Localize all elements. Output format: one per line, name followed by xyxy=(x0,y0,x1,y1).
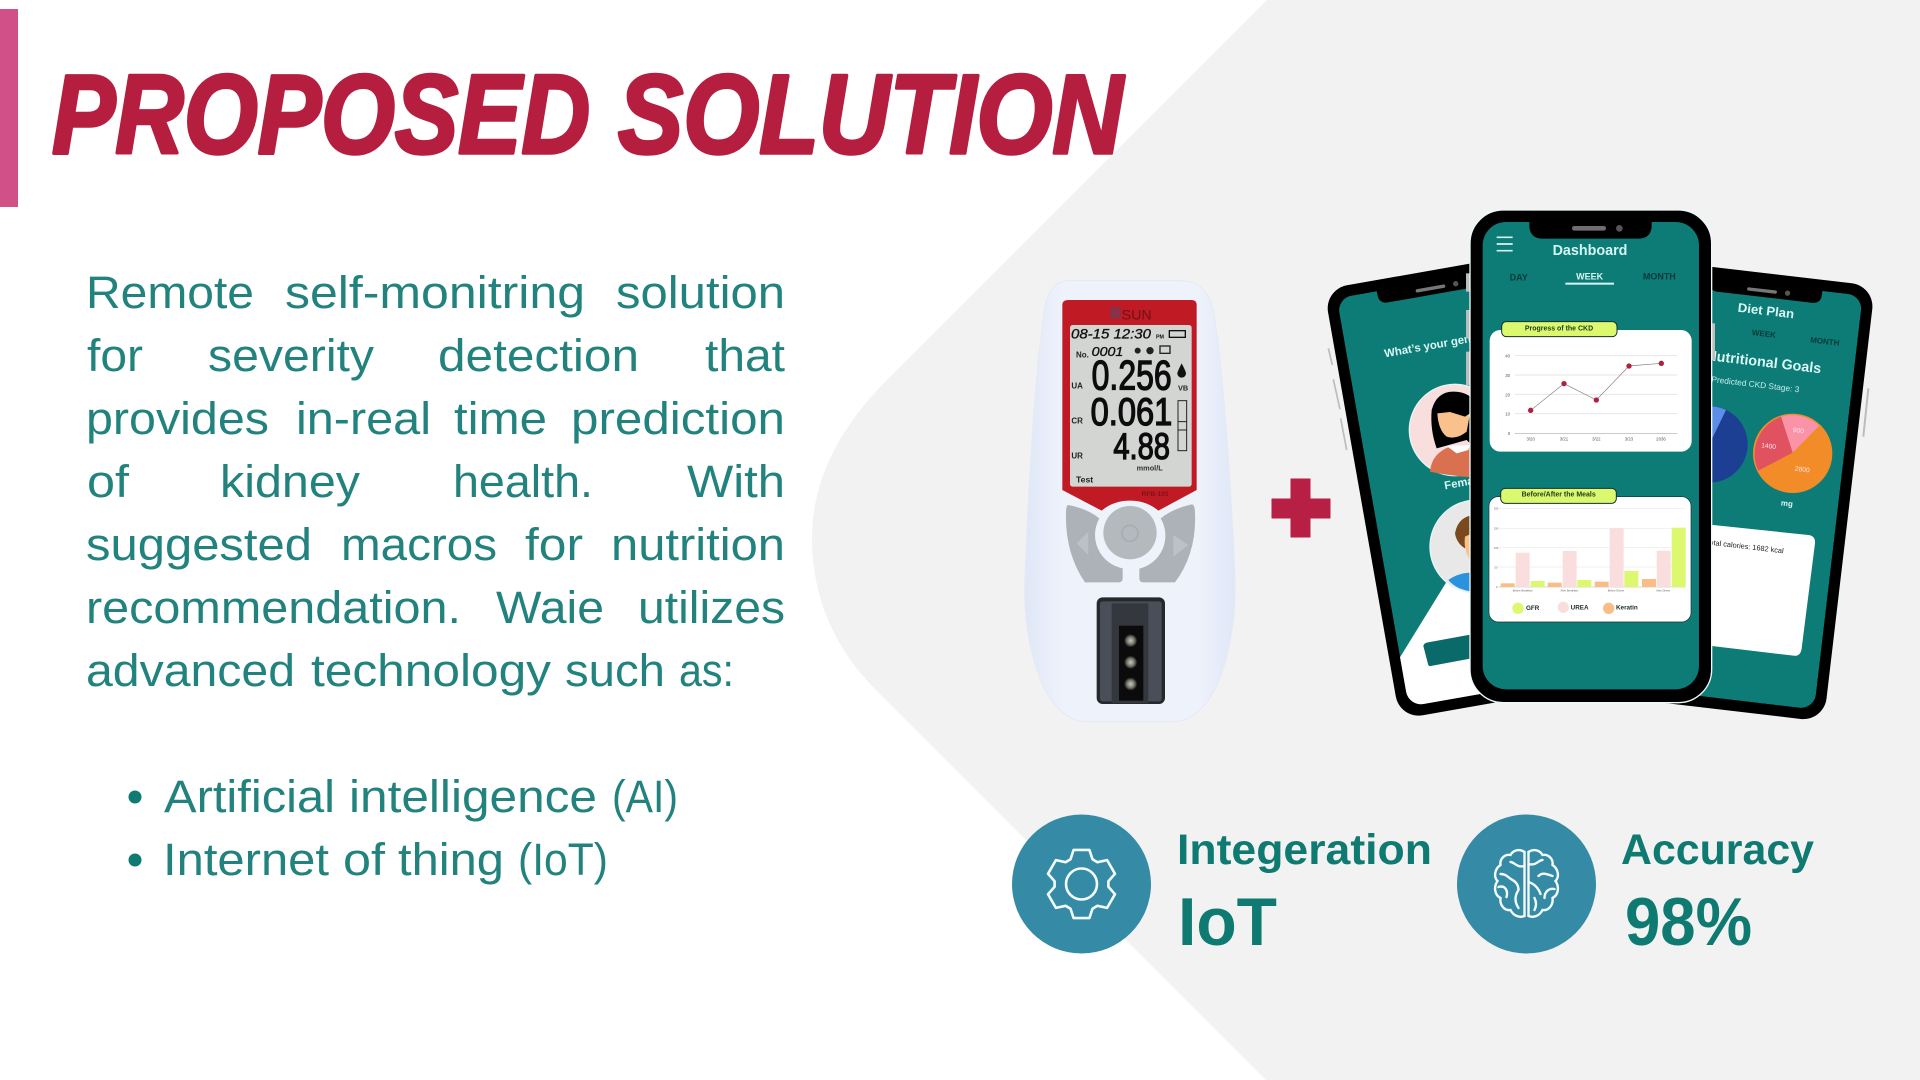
phone: diet plan screen (right): Diet Plan xyxy=(1737,301,1795,321)
body text xyxy=(86,267,786,696)
phone: gender screen (left) xyxy=(1328,264,1496,716)
body text: health. xyxy=(453,456,593,507)
body text: recommendation. xyxy=(86,582,461,633)
phone: gender screen (left): Female xyxy=(1443,474,1484,492)
bullet list: thing xyxy=(398,834,504,885)
phone: diet plan screen (right): WEEK xyxy=(1751,328,1777,340)
body text: advanced xyxy=(86,645,295,696)
stat: integration IoT: IoT xyxy=(1178,884,1277,960)
bar chart card: After Breakfast xyxy=(1561,588,1578,592)
device LCD screen: Test xyxy=(1076,475,1093,485)
title: PROPOSED xyxy=(52,52,590,177)
bullet list: (IoT) xyxy=(518,834,608,885)
body text: With xyxy=(687,456,785,507)
line chart card: 20 xyxy=(1505,392,1511,397)
body text: of xyxy=(87,456,130,507)
body text: nutrition xyxy=(611,519,785,570)
body text: detection xyxy=(438,330,639,381)
phone: diet plan screen (right): Nutritional Goals xyxy=(1706,348,1822,377)
bar chart card: Before Breakfast xyxy=(1513,588,1533,592)
bullet list xyxy=(128,771,678,885)
device LCD screen: mmol/L xyxy=(1137,464,1163,473)
bullet list: (AI) xyxy=(612,771,678,822)
bullet list: Artificial xyxy=(164,771,335,822)
title: SOLUTION xyxy=(618,52,1125,177)
phone: diet plan screen (right) xyxy=(1666,266,1872,720)
device LCD screen: No. xyxy=(1076,350,1089,359)
bar chart card: 100 xyxy=(1494,546,1499,550)
body text: utilizes xyxy=(638,582,785,633)
body text: provides xyxy=(86,393,269,444)
device LCD screen: SUN xyxy=(1122,306,1152,322)
phone: diet plan screen (right): MONTH xyxy=(1810,335,1840,348)
device test strip port xyxy=(1097,597,1165,704)
line chart card: 0 xyxy=(1508,431,1511,436)
device LCD screen: 08-15 12:30 xyxy=(1071,326,1151,342)
bullet list: Internet xyxy=(163,834,330,885)
line chart card: 3/23 xyxy=(1625,437,1634,442)
body text: solution xyxy=(616,267,785,318)
phone: diet plan screen (right): Predicted CKD Stage: 3 xyxy=(1711,374,1800,394)
icon: plus sign xyxy=(1272,479,1330,537)
device LCD screen: 0001 xyxy=(1092,344,1123,359)
accent bar xyxy=(0,9,18,207)
stat: integration IoT xyxy=(1012,814,1432,960)
bar chart card: Before/After the Meals xyxy=(1522,491,1596,498)
body text: kidney xyxy=(220,456,361,507)
line chart card: 3/22 xyxy=(1592,437,1601,442)
bar chart card: 150 xyxy=(1494,527,1499,531)
body text: in-real xyxy=(296,393,431,444)
icon: menu xyxy=(1497,237,1513,251)
device LCD screen: 0.256 xyxy=(1092,351,1172,398)
body text: that xyxy=(705,330,786,381)
device LCD screen: VB xyxy=(1178,384,1188,393)
device buttons xyxy=(1066,504,1195,582)
phone: diet plan screen (right): mg xyxy=(1780,498,1793,509)
period tabs: WEEK xyxy=(1576,271,1604,281)
period tabs: MONTH xyxy=(1643,271,1676,281)
bar chart card: 0 xyxy=(1496,585,1498,589)
device LCD screen: 0.061 xyxy=(1091,391,1172,434)
line chart card: 3/21 xyxy=(1560,437,1569,442)
bar chart card: After Dinner xyxy=(1656,588,1671,592)
line chart card: 30 xyxy=(1505,373,1511,378)
device LCD screen: CR xyxy=(1071,416,1083,425)
speaker and camera xyxy=(1572,225,1623,232)
device LCD screen: PM xyxy=(1156,335,1165,341)
phone: diet plan screen (right): Total calories: 1682 kcal xyxy=(1705,537,1785,555)
body text: severity xyxy=(208,330,375,381)
body text: suggested xyxy=(86,519,312,570)
bullet list: of xyxy=(343,834,386,885)
body text: Remote xyxy=(86,267,254,318)
line chart card: 3/20 xyxy=(1526,437,1535,442)
phone: diet plan screen (right): 900 xyxy=(1792,427,1805,435)
phone: gender screen (left): What’s your gender? xyxy=(1383,329,1496,360)
body text: technology xyxy=(311,645,552,696)
body text: Waie xyxy=(496,582,604,633)
body text: self-monitring xyxy=(285,267,585,318)
body text: as: xyxy=(679,645,734,696)
bar chart card: GFR xyxy=(1526,605,1540,612)
phone: diet plan screen (right): 1400 xyxy=(1761,442,1777,451)
period tabs xyxy=(1510,271,1676,285)
device LCD screen xyxy=(1070,306,1192,498)
device LCD screen: 4.88 xyxy=(1113,425,1170,467)
bar chart card: 200 xyxy=(1494,507,1499,511)
line chart card: 2036 xyxy=(1656,437,1666,442)
stat: accuracy 98%: 98% xyxy=(1625,884,1752,960)
stat: integration IoT: Integeration xyxy=(1177,826,1432,874)
title xyxy=(52,52,1126,177)
device red faceplate xyxy=(1062,300,1197,511)
line chart card: Progress of the CKD xyxy=(1525,326,1593,333)
device LCD screen: UR xyxy=(1071,451,1083,460)
bar chart card: UREA xyxy=(1571,605,1589,612)
phone: diet plan screen (right): 2800 xyxy=(1794,466,1810,474)
icon: urine analyzer device xyxy=(1025,281,1235,722)
bar chart card: Before Dinner xyxy=(1608,588,1624,592)
body text: for xyxy=(87,330,143,381)
stat: accuracy 98% xyxy=(1457,814,1814,960)
device LCD screen: RFB-101 xyxy=(1142,491,1169,498)
stat: accuracy 98%: Accuracy xyxy=(1621,826,1814,874)
bar chart card: 50 xyxy=(1495,565,1498,569)
line chart card: 40 xyxy=(1505,354,1511,359)
icon: brain xyxy=(1457,814,1596,954)
bullet list: intelligence xyxy=(349,771,597,822)
icon: gear xyxy=(1012,814,1151,954)
body text: prediction xyxy=(571,393,785,444)
line chart card: 10 xyxy=(1505,412,1511,417)
bar chart card xyxy=(1489,488,1691,622)
screen title: Dashboard xyxy=(1553,243,1627,259)
notch xyxy=(1529,220,1652,239)
device LCD screen: UA xyxy=(1071,381,1083,390)
graphics layer xyxy=(1012,210,1872,954)
body text: macros xyxy=(341,519,497,570)
phone: dashboard screen (center) xyxy=(1466,210,1715,703)
body text: for xyxy=(525,519,583,570)
period tabs: DAY xyxy=(1510,272,1528,282)
body text: such xyxy=(565,645,665,696)
body text: time xyxy=(454,393,547,444)
line chart card xyxy=(1490,322,1692,452)
bar chart card: Keratin xyxy=(1616,605,1638,612)
